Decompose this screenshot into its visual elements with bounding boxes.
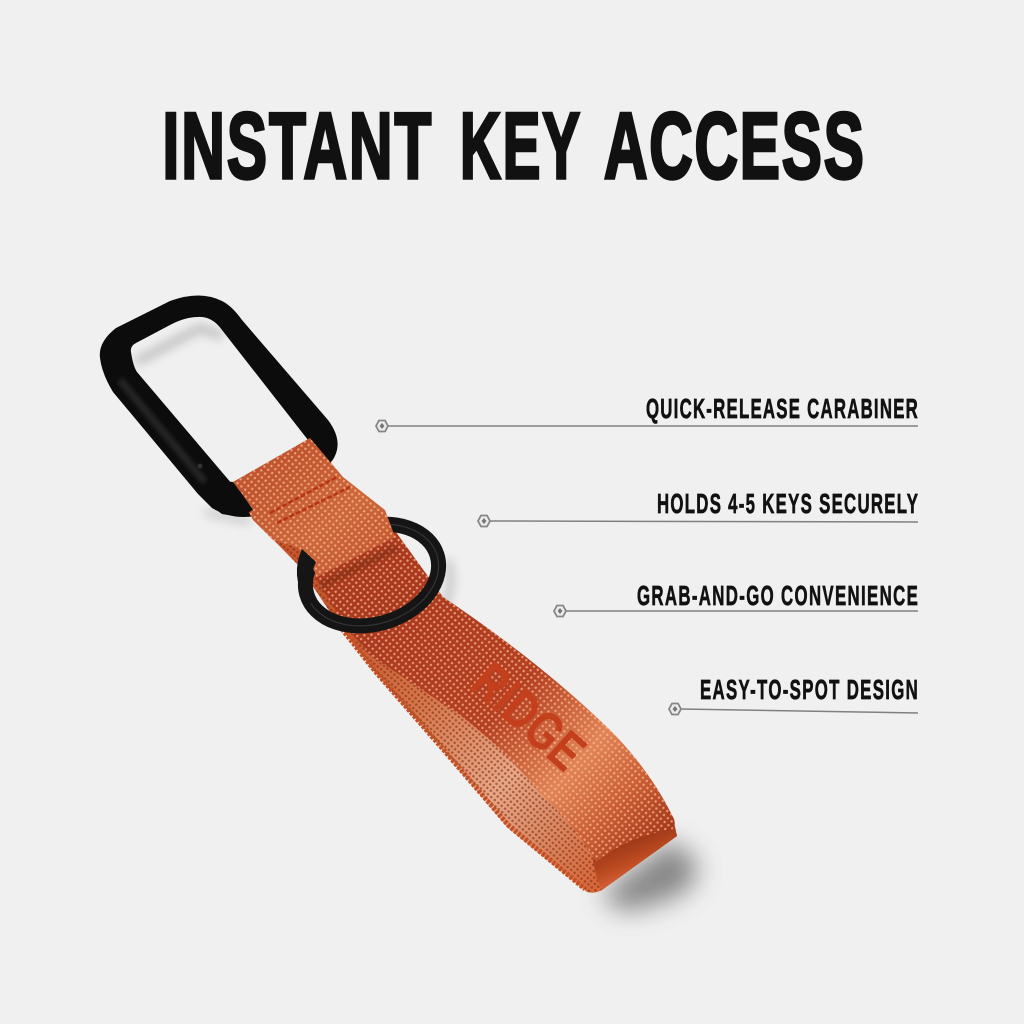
carabiner lower lug over webbing <box>205 482 253 515</box>
title: KEY <box>460 94 580 199</box>
carabiner gate highlight <box>120 380 205 482</box>
marker: hex bolt <box>478 516 490 526</box>
strap front layer with RIDGE logo <box>310 528 675 862</box>
stitching <box>270 477 350 523</box>
callout: grab-and-go convenience: GRAB-AND-GO CONVENIENCE <box>637 580 918 611</box>
callout: quick-release carabiner: QUICK-RELEASE CARABINER <box>646 393 918 424</box>
gate rivet <box>198 464 202 468</box>
callout: quick-release carabiner <box>376 393 918 432</box>
callout: easy-to-spot design: EASY-TO-SPOT DESIGN <box>700 674 918 705</box>
stitched edge <box>342 629 585 889</box>
product: carabiner key strap <box>100 296 697 912</box>
key ring tip over strap <box>297 549 320 606</box>
webbing loop through carabiner <box>205 438 395 606</box>
marker: hex bolt <box>669 704 681 714</box>
marker: hex bolt <box>554 606 566 616</box>
strap shadow <box>600 840 697 912</box>
callout: holds keys securely: HOLDS 4-5 KEYS SECURELY <box>657 488 918 519</box>
callout: grab-and-go convenience <box>554 580 918 616</box>
soft shadows beside ring and carabiner <box>136 328 451 612</box>
title: ACCESS <box>604 93 864 198</box>
callout: holds keys securely <box>478 488 918 526</box>
title <box>162 93 864 199</box>
split key ring <box>293 508 451 642</box>
strap underside layer <box>257 523 677 893</box>
callout: easy-to-spot design <box>669 674 918 714</box>
strap tip inner loop <box>593 824 677 890</box>
shadow cast by webbing fold on strap <box>320 548 397 586</box>
logo: RIDGE: RIDGE <box>460 651 597 783</box>
carabiner <box>100 296 338 517</box>
marker: hex bolt <box>376 420 388 432</box>
title: INSTANT <box>162 93 431 198</box>
